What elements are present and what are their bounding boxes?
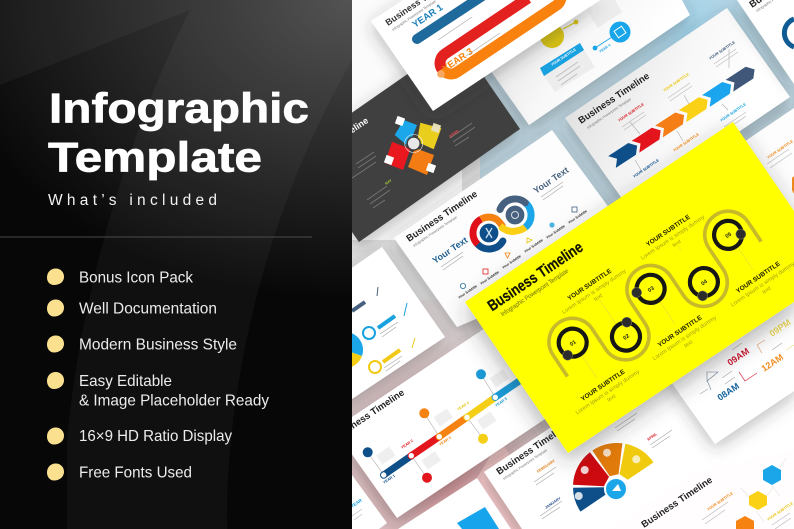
bullet: free fonts: Free Fonts Used [79, 464, 192, 481]
text block: upper subtitle 1: text [593, 293, 604, 303]
text block: lower subtitle 1: Lorem Ipsum is simply dummy [575, 369, 641, 416]
slide: clock times: 09AM [726, 346, 751, 368]
bullet: hd ratio: 16×9 HD Ratio Display [79, 428, 232, 445]
slide: year line timeline: YEAR 4 [456, 400, 471, 412]
bullet: easy editable: & Image Placeholder Ready [79, 393, 269, 410]
slide: yellow business timeline [465, 122, 794, 453]
milestone 05 [712, 218, 746, 251]
text block: lower subtitle 3: text [762, 285, 773, 296]
milestone 01: 01 [569, 339, 578, 348]
text block: upper subtitle 2: Lorem Ipsum is simply dummy [640, 214, 706, 262]
text block: lower subtitle 1: text [606, 393, 618, 404]
slide: arrow timeline: YOUR SUBTITLE [617, 102, 645, 123]
milestone 04 [688, 266, 720, 302]
slide: arrow timeline: YOUR SUBTITLE [672, 132, 700, 153]
title: Template [48, 134, 262, 180]
slide: arrow timeline: Business Timeline [577, 71, 652, 126]
slide: hexagon timeline [640, 458, 794, 529]
text block: upper subtitle 2: YOUR SUBTITLE [645, 213, 692, 248]
slide: year tracks: Infographic Powerpoint Template [391, 0, 437, 32]
slide: dark four squares: APRIL [448, 128, 461, 139]
text block: lower subtitle 2: Lorem Ipsum is simply dummy [652, 315, 718, 362]
feature list [47, 268, 269, 481]
slide: infinity loop: Your Subtitle [567, 209, 588, 225]
collage background [352, 0, 794, 529]
slide: year tracks [371, 0, 600, 111]
subheading: Infographic Powerpoint Template [500, 268, 570, 318]
slide: arrow timeline: YOUR SUBTITLE [708, 40, 736, 61]
text block: lower subtitle 3: YOUR SUBTITLE [735, 260, 782, 295]
slide: year line timeline: YEAR 3 [438, 436, 452, 447]
slide: top right arc [737, 0, 794, 84]
left dark panel [0, 0, 352, 529]
slide: infinity loop [394, 130, 640, 327]
slide: year tracks: YEAR 1 [411, 2, 446, 30]
slide: hexagon timeline: YOUR SUBTITLE [766, 501, 794, 522]
slide: dark four squares: MAY [384, 178, 393, 186]
subtitle: What’s included [48, 192, 217, 209]
milestone 04: 04 [700, 278, 710, 287]
text block: lower subtitle 2: YOUR SUBTITLE [657, 314, 704, 349]
slide: arrow timeline: YOUR SUBTITLE [632, 158, 660, 179]
slide: arrow timeline [565, 8, 790, 207]
milestone 03 [631, 272, 667, 305]
slide: semicircle pie: Infographic Powerpoint Template [502, 448, 548, 481]
slide: infinity loop: Business Timeline [405, 189, 480, 244]
slide: orange hexagon edge: YOUR SUBTITLE [766, 139, 794, 160]
title: Infographic [49, 84, 309, 132]
slide: infinity loop: Your Subtitle [545, 224, 566, 240]
slide: year line timeline: YEAR 1 [382, 474, 396, 485]
slide: arrow timeline: YOUR SUBTITLE [662, 72, 690, 93]
text block: lower subtitle 1: YOUR SUBTITLE [580, 368, 627, 403]
connector lines [582, 246, 754, 378]
slide: infinity loop: Your Subtitle [501, 254, 522, 270]
bullet: easy editable: Easy Editable [79, 373, 172, 390]
slide: infinity loop: Infographic Powerpoint Template [412, 215, 458, 248]
slide: clock times: 08AM [716, 381, 741, 403]
milestone 01 [556, 326, 589, 360]
slide: infinity loop: Your Subtitle [479, 270, 500, 286]
text block: lower subtitle 2: text [683, 339, 694, 349]
slide: year line timeline [332, 322, 557, 518]
text block: upper subtitle 1: Lorem Ipsum is simply dummy [561, 268, 628, 316]
slide: blue circle timeline: YOUR SUBTITLE [550, 47, 577, 67]
slide: semicircle pie [484, 365, 794, 529]
slide: hexagon timeline: YOUR SUBTITLE [706, 491, 734, 512]
slide: dark four squares: Business Timeline [299, 115, 370, 168]
slide: blue circle timeline [466, 0, 690, 125]
milestone 03: 03 [647, 286, 655, 294]
slide: infinity loop: Your Subtitle [523, 238, 544, 254]
slide: semicircle pie: JANUARY [544, 496, 562, 510]
slide: corner fragment [352, 475, 387, 529]
slide: corner fragment: YEAR [350, 497, 364, 509]
slide: blue circle timeline: YEAR 4 [598, 43, 611, 54]
slide: semicircle pie: Business Timeline [495, 422, 570, 477]
slide: arrow timeline: Infographic Powerpoint Template [586, 97, 632, 130]
slide: semicircle pie: FEBRUARY [536, 459, 556, 474]
slide: infinity loop: Your Text [532, 165, 570, 196]
slide: infinity loop: Your Subtitle [457, 284, 478, 300]
slide: clock times: 12AM [760, 352, 785, 374]
bullet: well documentation: Well Documentation [79, 300, 217, 318]
milestone 02 [610, 317, 642, 353]
slide: progress bars and pie [340, 247, 445, 407]
slide: blue box [398, 478, 511, 529]
bullet: modern business style: Modern Business Style [79, 336, 237, 354]
divider [0, 236, 312, 238]
slide: clock times: 09PM [768, 317, 793, 339]
slide: arrow timeline: YOUR SUBTITLE [719, 102, 747, 123]
slide: year line timeline: YEAR 5 [494, 397, 508, 408]
title [48, 84, 309, 180]
slide: clock times [663, 309, 794, 454]
heading: business timeline: Business Timeline [485, 239, 587, 315]
slide: semicircle pie: APRIL [646, 432, 659, 442]
text block: upper subtitle 2: text [672, 239, 683, 249]
slide: hexagon timeline: Business Timeline [640, 475, 715, 529]
slide: orange hexagon edge [744, 108, 794, 211]
slide: infinity loop: Your Text [431, 235, 469, 266]
milestone 05: 05 [725, 232, 733, 240]
milestone 02: 02 [622, 333, 631, 342]
slide: year line timeline: Business Timeline [332, 387, 407, 443]
text block: upper subtitle 1: YOUR SUBTITLE [566, 267, 614, 302]
bullet: bonus icon pack: Bonus Icon Pack [79, 270, 194, 286]
bullet: easy editable [47, 372, 269, 410]
slide: year line timeline: YEAR 2 [400, 439, 414, 450]
slide: year tracks: YEAR 3 [441, 46, 475, 74]
serpentine track [547, 209, 762, 378]
slide: dark four squares [352, 70, 524, 252]
